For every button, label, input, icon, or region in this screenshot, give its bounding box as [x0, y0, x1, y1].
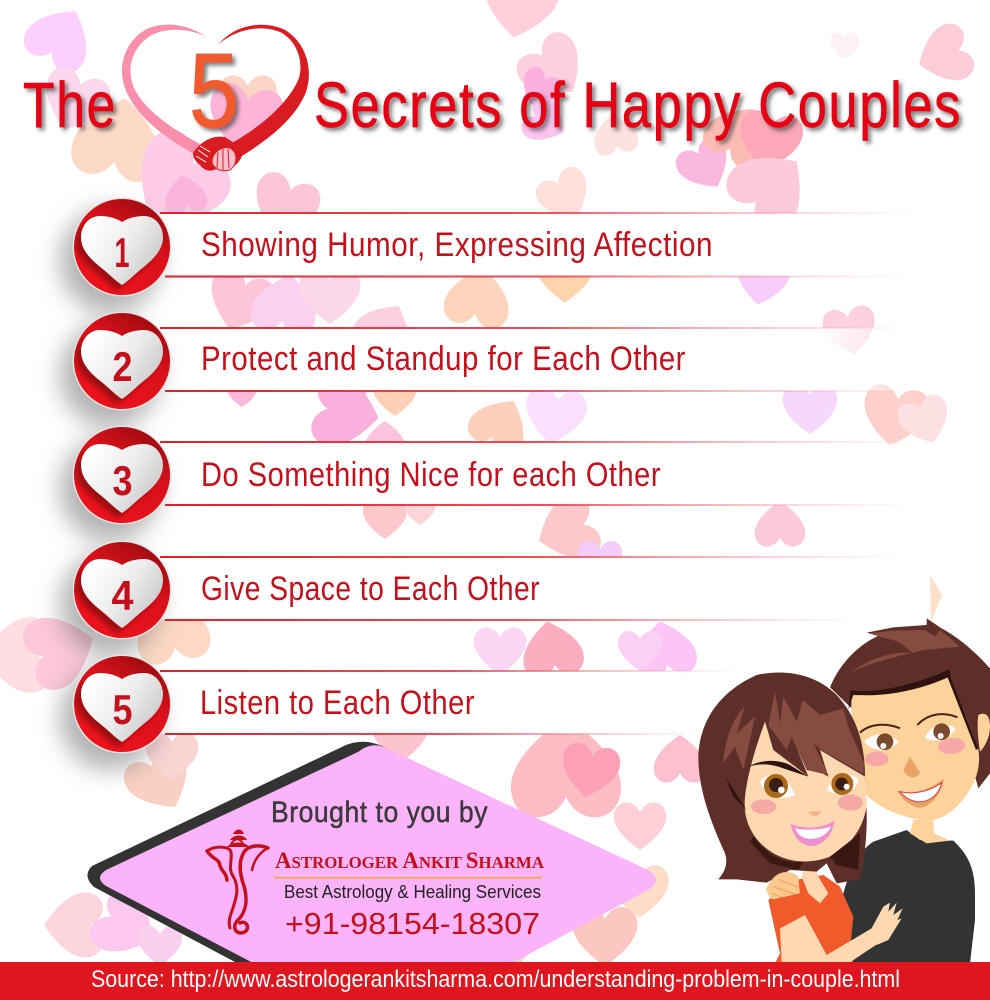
title: [23, 25, 962, 171]
big number 5: 5: [189, 32, 239, 150]
row 2: [60, 312, 930, 427]
panel: brought to you by: [87, 742, 656, 975]
row 1: Showing Humor, Expressing Affection: [201, 226, 713, 264]
source bar: Source: http://www.astrologerankitsharma.com/understanding-problem-in-couple.html: [91, 966, 900, 993]
row 4: Give Space to Each Other: [201, 570, 540, 608]
icon: ganesha logo: [207, 830, 268, 933]
title text: The: The: [23, 69, 117, 141]
row 3: [60, 426, 930, 541]
phone number: +91-98154-18307: [285, 906, 540, 941]
row 1: 1: [114, 229, 130, 276]
icon: heart ring with joined hands: [122, 25, 309, 171]
illustration: couple: [698, 618, 990, 963]
logo name: ASTROLOGER ANKIT SHARMA: [275, 848, 545, 873]
row 5: [60, 654, 760, 770]
row 4: [60, 540, 910, 656]
source bar: [0, 962, 990, 1000]
row 5: Listen to Each Other: [200, 684, 475, 722]
row 2: Protect and Standup for Each Other: [201, 340, 686, 378]
woman: [698, 672, 903, 963]
logo tagline: Best Astrology & Healing Services: [284, 882, 541, 902]
heading: brought to you by: Brought to you by: [271, 796, 488, 829]
row 1: [60, 198, 930, 313]
row 5: 5: [112, 686, 132, 733]
woman's arm and hands: [780, 915, 878, 963]
row 3: Do Something Nice for each Other: [201, 456, 661, 494]
row 4: 4: [112, 572, 134, 619]
row 3: 3: [112, 457, 132, 504]
row 2: 2: [112, 343, 132, 390]
man: [830, 618, 990, 963]
